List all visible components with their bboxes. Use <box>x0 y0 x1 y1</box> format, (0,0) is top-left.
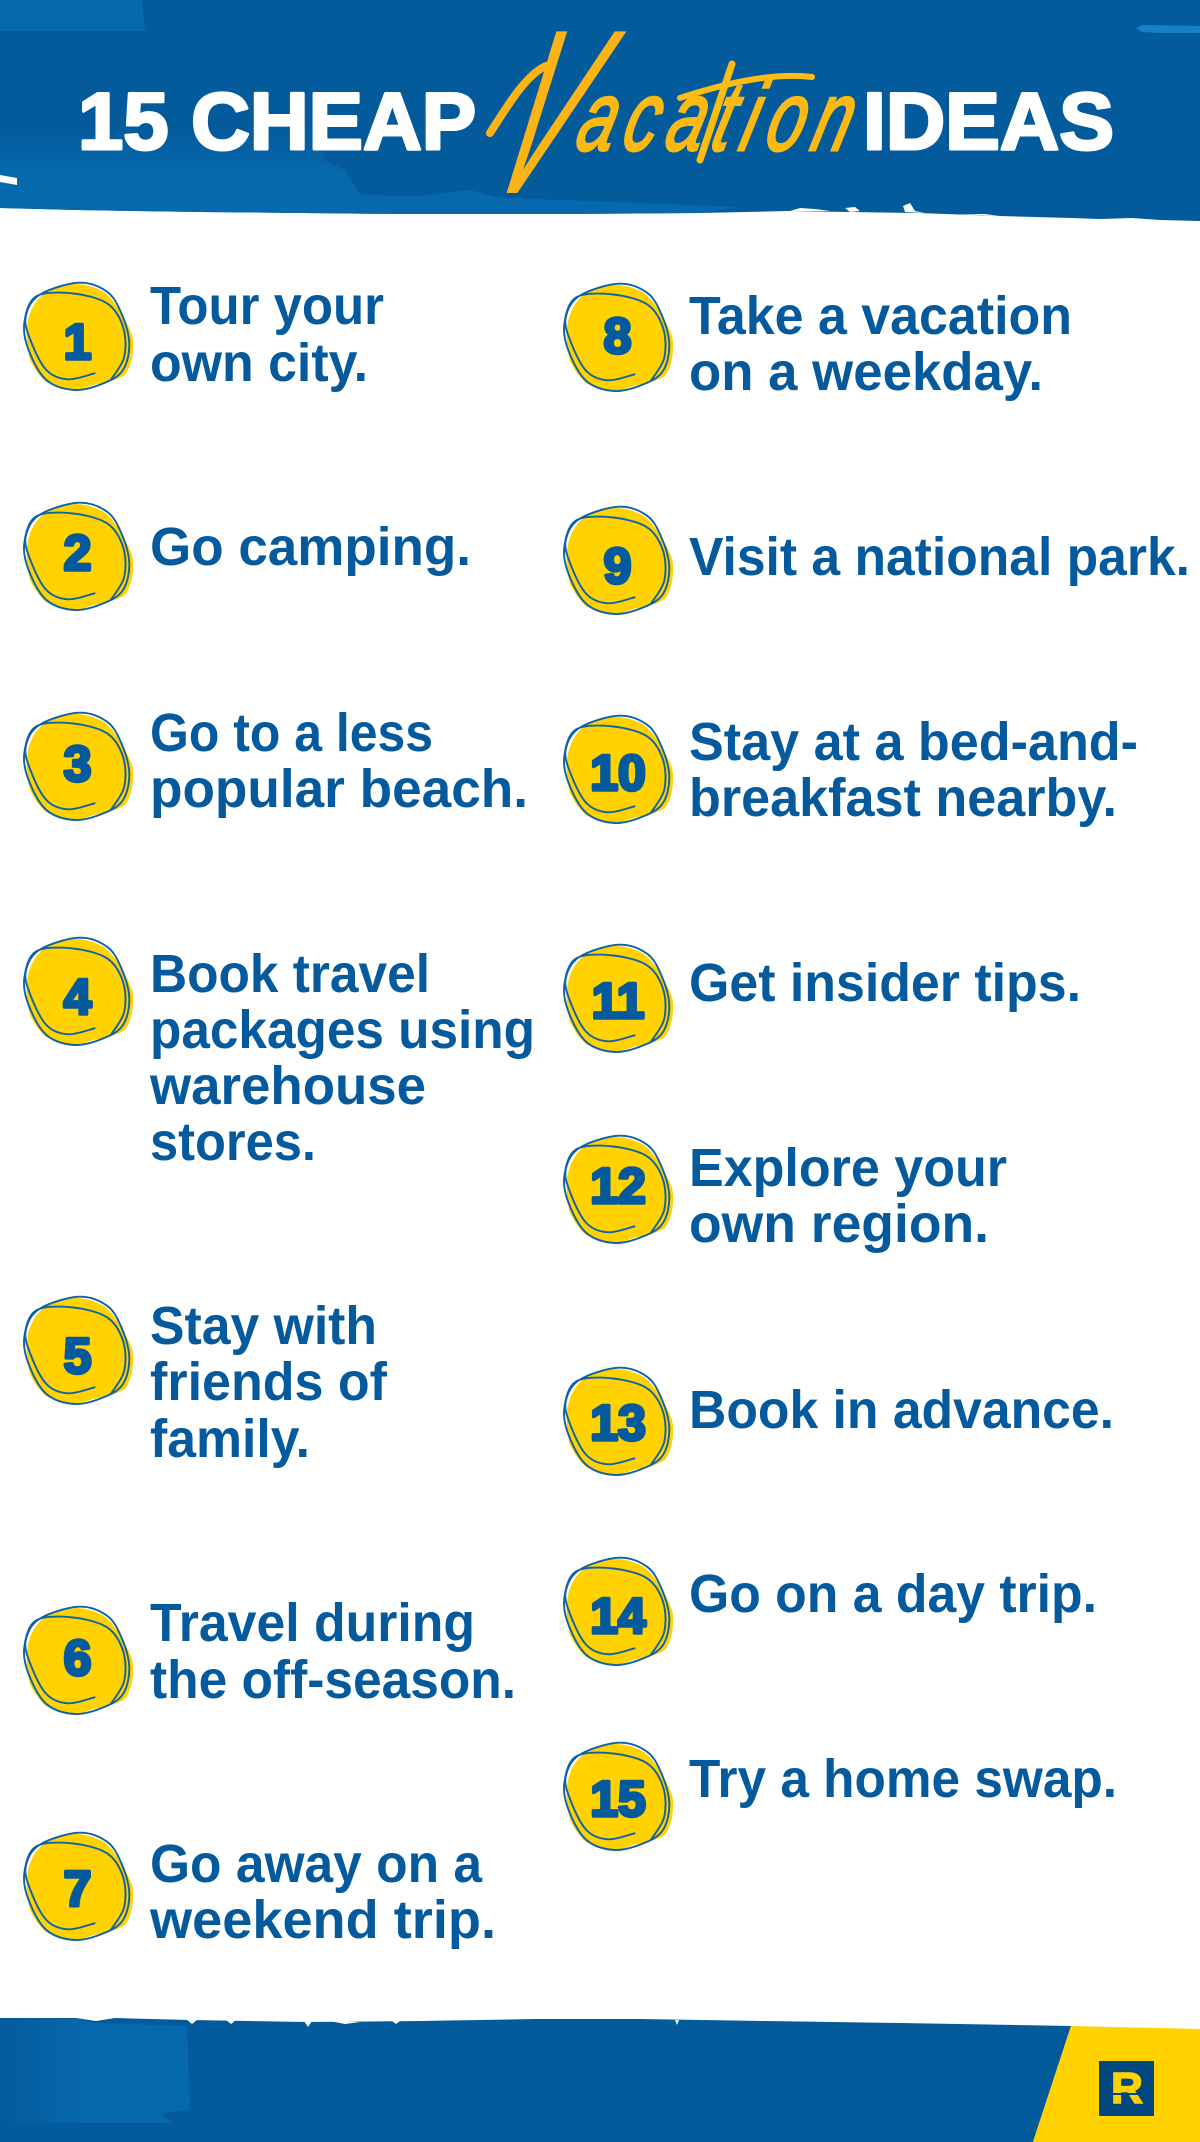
text: Travel during the off-season: Travel during <box>150 1593 475 1653</box>
text: Book travel packages using warehouse stores: packages using <box>150 1000 535 1060</box>
item 6 <box>24 1593 516 1714</box>
badge 2: 2 <box>64 525 91 581</box>
text: Take a vacation on a weekday <box>689 286 1072 402</box>
text: Go to a less popular beach: Go to a less <box>150 703 433 763</box>
text: Go away on a weekend trip: weekend trip. <box>149 1890 496 1950</box>
badge 4 <box>24 938 133 1045</box>
item 7 <box>24 1833 496 1950</box>
text: Explore your own region <box>689 1138 1007 1254</box>
text: Book travel packages using warehouse stores: warehouse <box>149 1056 426 1116</box>
text: Visit a national park: Visit a national park. <box>689 527 1190 587</box>
text: Tour your own city: Tour your <box>150 276 384 336</box>
badge 3 <box>24 713 133 820</box>
badge 6 <box>24 1607 133 1714</box>
badge 11: 11 <box>592 973 644 1029</box>
item 15 <box>564 1743 1117 1850</box>
title: Vacation script: acation <box>567 62 869 172</box>
badge 5: 5 <box>64 1328 91 1384</box>
text: Go on a day trip: Go on a day trip. <box>689 1564 1097 1624</box>
item 2 <box>24 503 471 610</box>
item 8 <box>564 284 1072 402</box>
text: Tour your own city <box>150 276 384 393</box>
text: Go camping: Go camping. <box>150 517 471 577</box>
badge 5 <box>24 1297 133 1404</box>
text: Stay at a bed-and-breakfast nearby <box>689 712 1138 828</box>
item 9 <box>564 507 1190 614</box>
text: Take a vacation on a weekday: Take a vacation <box>689 286 1072 346</box>
item 13 <box>564 1368 1114 1475</box>
text: Stay with friends of family: family. <box>150 1409 310 1469</box>
text: Travel during the off-season: the off-season. <box>150 1650 516 1710</box>
badge 13: 13 <box>590 1395 646 1451</box>
text: Stay with friends of family <box>150 1296 388 1469</box>
badge 4: 4 <box>64 969 92 1025</box>
badge 10 <box>564 716 673 823</box>
text: Stay at a bed-and-breakfast nearby: breakfast nearby. <box>689 768 1117 828</box>
text: Go to a less popular beach <box>150 703 528 819</box>
item 3 <box>24 703 528 820</box>
text: Book in advance: Book in advance. <box>689 1380 1114 1440</box>
text: Stay with friends of family: friends of <box>150 1352 388 1412</box>
text: Explore your own region: own region. <box>689 1194 989 1254</box>
title: Vacation script <box>463 0 869 242</box>
badge 11 <box>564 945 673 1052</box>
text: Get insider tips: Get insider tips. <box>689 953 1081 1013</box>
badge 10: 10 <box>590 745 646 801</box>
title <box>78 0 1114 242</box>
text: Go away on a weekend trip <box>149 1834 496 1950</box>
badge 6: 6 <box>64 1630 91 1686</box>
badge 8: 8 <box>604 308 631 364</box>
badge 7: 7 <box>64 1861 91 1917</box>
title: IDEAS: IDEAS <box>863 77 1114 167</box>
badge 2 <box>24 503 133 610</box>
logo: R <box>1111 2064 1143 2113</box>
item 11 <box>564 945 1081 1052</box>
text: Book travel packages using warehouse stores: Book travel <box>150 944 430 1004</box>
badge 7 <box>24 1833 133 1940</box>
item 4 <box>24 938 535 1172</box>
item 5 <box>24 1296 388 1469</box>
badge 8 <box>564 284 673 391</box>
badge 9 <box>564 507 673 614</box>
text: Travel during the off-season <box>150 1593 516 1710</box>
badge 1 <box>24 283 133 390</box>
header banner <box>0 0 1200 221</box>
badge 14 <box>564 1558 673 1665</box>
text: Go to a less popular beach: popular beach. <box>150 759 528 819</box>
logo <box>1099 2061 1154 2116</box>
badge 13 <box>564 1368 673 1475</box>
title: 15 CHEAP: 15 CHEAP <box>78 77 476 167</box>
text: Book travel packages using warehouse stores: stores. <box>150 1112 316 1172</box>
badge 12: 12 <box>590 1158 646 1214</box>
badge 14: 14 <box>590 1588 646 1644</box>
badge 9: 9 <box>604 538 631 594</box>
text: Go away on a weekend trip: Go away on a <box>150 1834 483 1894</box>
text: Stay with friends of family: Stay with <box>150 1296 377 1356</box>
badge 15 <box>564 1743 673 1850</box>
text: Try a home swap: Try a home swap. <box>689 1749 1117 1809</box>
badge 15: 15 <box>590 1771 646 1827</box>
item 14 <box>564 1558 1097 1665</box>
badge 3: 3 <box>64 736 91 792</box>
footer banner <box>0 2018 1071 2142</box>
item 12 <box>564 1136 1007 1254</box>
text: Explore your own region: Explore your <box>689 1138 1007 1198</box>
text: Stay at a bed-and-breakfast nearby: Stay at a bed-and- <box>689 712 1138 772</box>
text: Book travel packages using warehouse stores <box>149 944 535 1172</box>
badge 12 <box>564 1136 673 1243</box>
text: Take a vacation on a weekday: on a weekday. <box>689 342 1043 402</box>
text: Tour your own city: own city. <box>150 333 368 393</box>
footer logo panel <box>1033 2026 1200 2142</box>
badge 1: 1 <box>64 314 91 370</box>
item 1 <box>24 276 384 393</box>
item 10 <box>564 712 1138 828</box>
